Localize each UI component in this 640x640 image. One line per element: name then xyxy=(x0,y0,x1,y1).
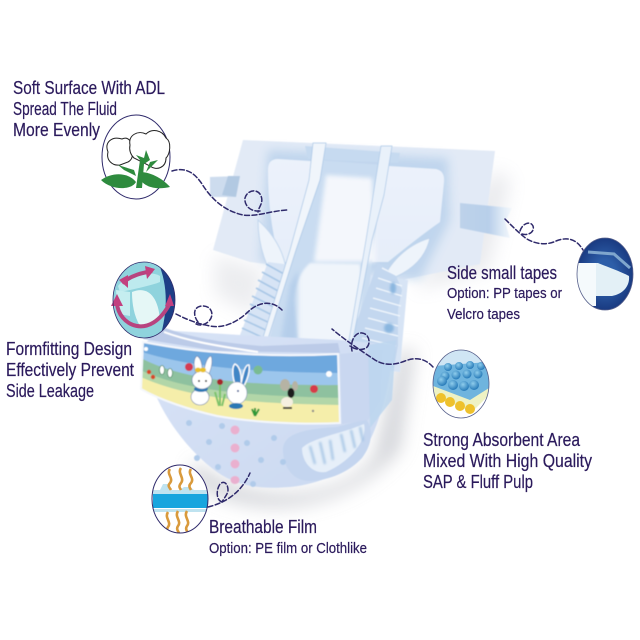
text: breathable film: Breathable Film xyxy=(209,517,317,537)
text: breathable film: Option: PE film or Clothlike xyxy=(209,541,367,557)
left curved flap xyxy=(258,220,287,290)
text: strong absorbent area: Strong Absorbent Area xyxy=(423,430,581,450)
dashed connector: breathable film xyxy=(208,473,250,507)
cotton bolls xyxy=(107,131,170,168)
drop shadows xyxy=(190,170,510,507)
icon: absorbent layers circle xyxy=(433,350,489,418)
right curved flap xyxy=(382,238,430,282)
text: soft surface xyxy=(13,78,165,140)
dashed connector: side tapes xyxy=(505,219,583,250)
right side leg gathers xyxy=(340,350,382,424)
printed front landing band xyxy=(142,342,340,424)
text: soft surface: More Evenly xyxy=(13,120,100,140)
dashed connector: soft surface xyxy=(172,170,287,215)
central panel between cuffs xyxy=(268,160,384,345)
small flowers and plants xyxy=(144,347,332,416)
printed bows and stars xyxy=(186,420,286,487)
text: side small tapes: Side small tapes xyxy=(447,263,557,283)
text: breathable film xyxy=(209,517,367,557)
icon: breathable film circle xyxy=(152,465,208,533)
rabbit one xyxy=(191,356,212,405)
left back tape xyxy=(210,176,240,197)
leg opening inner ruffle xyxy=(302,424,365,472)
text: strong absorbent area: SAP & Fluff Pulp xyxy=(423,472,533,492)
right standing leg cuff xyxy=(349,146,392,340)
text: formfitting design: Formfitting Design xyxy=(6,339,132,359)
dog figure xyxy=(280,379,298,409)
text: side small tapes xyxy=(447,263,562,323)
right back tape xyxy=(460,203,512,238)
front leg opening xyxy=(283,419,371,481)
band upper white stripe xyxy=(143,326,340,353)
icon: cotton plant circle xyxy=(101,115,170,199)
text: formfitting design xyxy=(6,339,134,401)
central lower core xyxy=(294,263,362,345)
text: formfitting design: Effectively Prevent xyxy=(6,360,134,380)
text: side small tapes: Option: PP tapes or xyxy=(447,286,562,302)
lower gathered body xyxy=(240,262,408,372)
dashed connector: absorbent area xyxy=(332,329,433,367)
left ruffles xyxy=(242,264,284,340)
central upper core xyxy=(314,175,376,262)
left inner side tint xyxy=(280,270,298,345)
band outline xyxy=(141,342,340,424)
text: strong absorbent area: Mixed With High Quality xyxy=(423,451,592,471)
ruffle beads xyxy=(374,282,396,371)
text: strong absorbent area xyxy=(423,430,592,492)
back waist wings xyxy=(213,140,495,281)
icon: side tape circle xyxy=(576,238,633,310)
wing edge tint xyxy=(260,150,450,280)
green leaves xyxy=(101,150,170,188)
text: soft surface: Soft Surface With ADL xyxy=(13,78,165,98)
text: soft surface: Spread The Fluid xyxy=(13,99,117,119)
absorbent inner sheet xyxy=(268,159,444,262)
text: side small tapes: Velcro tapes xyxy=(447,307,520,323)
icon: formfitting design circle xyxy=(111,262,178,338)
dashed connector: formfitting design xyxy=(176,303,282,327)
front body xyxy=(143,330,396,488)
top waist strip xyxy=(305,146,400,163)
rabbit two xyxy=(227,364,249,409)
diaper illustration xyxy=(130,140,512,507)
left standing leg cuff xyxy=(261,143,326,345)
text: formfitting design: Side Leakage xyxy=(6,381,94,401)
right ruffled elastic xyxy=(350,262,402,368)
pink arrows xyxy=(117,271,170,326)
